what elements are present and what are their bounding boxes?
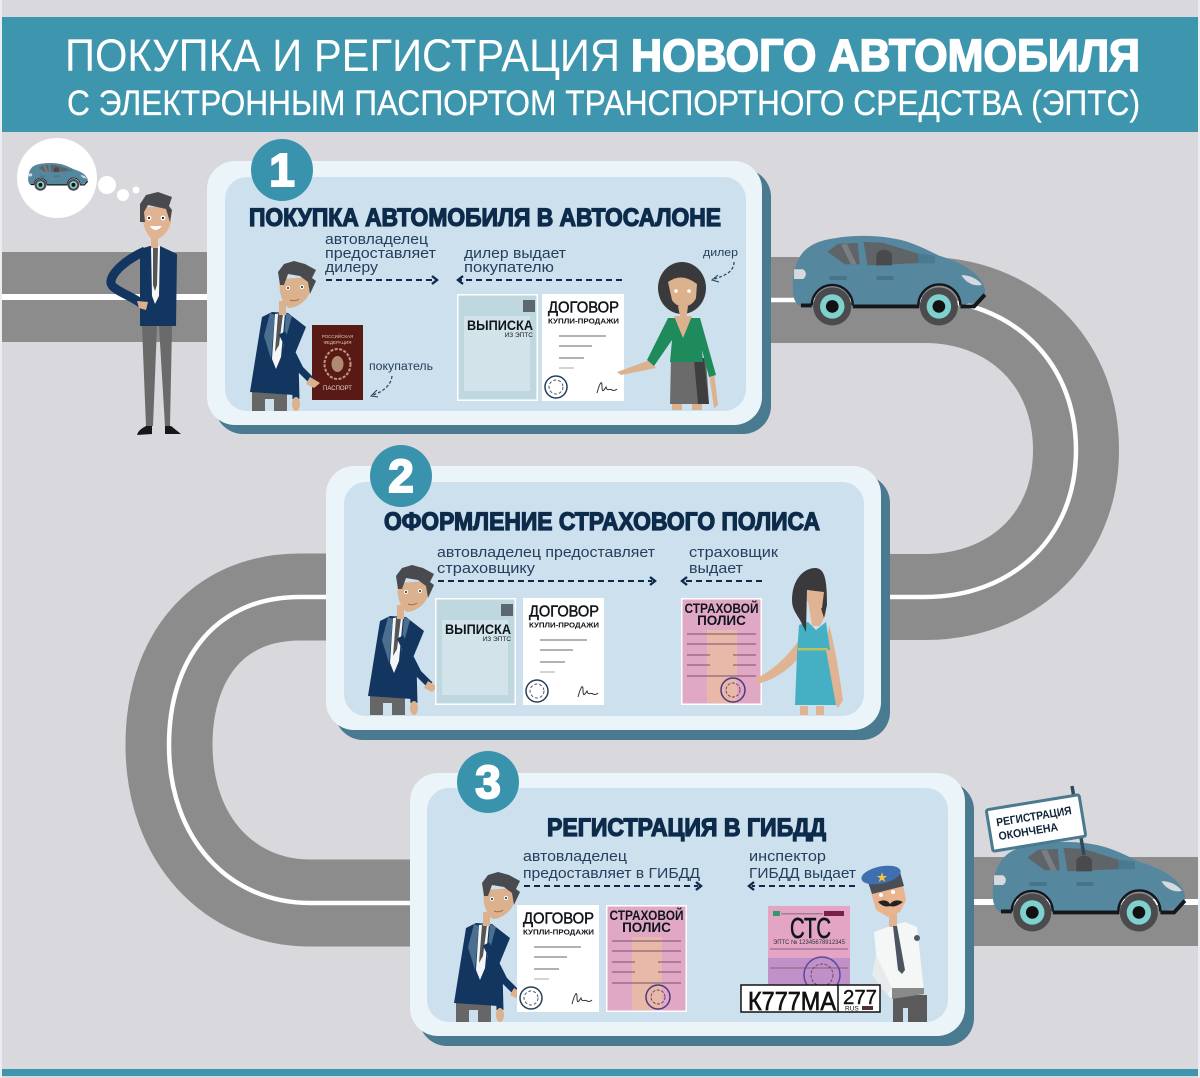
heading: РЕГИСТРАЦИЯ В ГИБДД — [547, 814, 826, 842]
icon: small car — [28, 163, 88, 191]
text: owner gives: автовладелец предоставляет — [437, 544, 655, 561]
text: dealer gives: дилер выдает — [464, 245, 566, 262]
sign post — [1072, 786, 1084, 855]
document: insurance policy: СТРАХОВОЙ — [684, 601, 758, 616]
heading: ОФОРМЛЕНИЕ СТРАХОВОГО ПОЛИСА — [384, 508, 820, 536]
document: insurance policy — [681, 598, 762, 705]
buyer figure — [250, 261, 320, 411]
panel: step 3 — [410, 751, 974, 1046]
license plate: К777МА — [748, 986, 837, 1016]
text: owner gives: дилеру — [325, 259, 379, 276]
arrow left — [749, 882, 855, 890]
document: contract: КУПЛИ-ПРОДАЖИ — [548, 316, 619, 326]
document: contract: ДОГОВОР — [529, 604, 599, 620]
document: STS: СТС — [790, 913, 831, 945]
heading: ПОКУПКА АВТОМОБИЛЯ В АВТОСАЛОНЕ — [249, 204, 721, 232]
text: owner gives: автовладелец — [325, 231, 428, 248]
arrow right — [438, 577, 655, 585]
arrow left — [458, 276, 622, 284]
passport: ФЕДЕРАЦИЯ — [324, 340, 352, 345]
text: insurer gives: страховщик — [689, 544, 778, 561]
text: inspector gives: инспектор — [749, 848, 826, 865]
title line 1: НОВОГО АВТОМОБИЛЯ — [631, 30, 1140, 81]
text: owner gives — [437, 544, 655, 577]
document: contract — [523, 598, 604, 705]
panel: step 1 — [207, 139, 771, 434]
text: insurer gives — [689, 544, 778, 577]
step number 3: 3 — [475, 756, 501, 808]
title line 1 — [65, 30, 1140, 81]
sign: registration finished: ОКОНЧЕНА — [998, 822, 1059, 843]
document: contract — [517, 905, 599, 1012]
arrow right — [524, 882, 701, 890]
text: owner gives: страховщику — [437, 560, 536, 577]
icon: car — [993, 842, 1185, 932]
step number 1: 1 — [269, 144, 295, 196]
passport: РОССИЙСКАЯ — [322, 332, 353, 339]
arrow right — [326, 276, 437, 284]
thought bubble with car — [17, 138, 140, 218]
text: dealer gives — [464, 245, 566, 276]
passport: ПАСПОРТ — [323, 386, 352, 392]
owner figure — [368, 565, 438, 715]
document: STS — [768, 906, 850, 993]
label: dealer — [703, 247, 738, 282]
document: contract — [542, 294, 624, 401]
text: owner gives — [325, 231, 436, 276]
text: dealer gives: покупателю — [464, 259, 554, 276]
document: insurance policy: ПОЛИС — [622, 920, 671, 935]
text: owner gives — [523, 848, 700, 882]
document: insurance policy: ПОЛИС — [697, 613, 746, 628]
road network — [2, 252, 1198, 946]
arrow left — [682, 577, 762, 585]
header banner — [2, 17, 1198, 132]
step number 2: 2 — [388, 450, 414, 502]
insurer figure — [755, 568, 843, 715]
text: owner gives: предоставляет в ГИБДД — [523, 865, 700, 882]
document: contract: КУПЛИ-ПРОДАЖИ — [523, 928, 594, 936]
document: contract: КУПЛИ-ПРОДАЖИ — [529, 620, 599, 630]
license plate: RUS — [845, 1006, 859, 1012]
inspector figure: ★ — [876, 872, 888, 884]
step number 2 — [370, 445, 432, 507]
label: buyer: покупатель — [369, 361, 433, 373]
sign: registration finished: РЕГИСТРАЦИЯ — [996, 805, 1073, 829]
text: inspector gives: ГИБДД выдает — [749, 865, 856, 882]
document: EPTS extract — [435, 598, 516, 705]
label: buyer — [369, 361, 433, 397]
label: dealer: дилер — [703, 247, 738, 259]
document: contract: ДОГОВОР — [548, 300, 619, 316]
license plate — [741, 985, 880, 1016]
panel: step 2 — [326, 445, 890, 740]
bottom bar — [2, 1069, 1198, 1076]
document: EPTS extract: ВЫПИСКА — [467, 317, 533, 333]
license plate: 277 — [843, 987, 877, 1009]
document: insurance policy: СТРАХОВОЙ — [610, 908, 684, 923]
document: EPTS extract — [457, 294, 538, 401]
step number 3 — [457, 751, 519, 813]
sign: registration finished — [986, 795, 1086, 851]
document: contract: ДОГОВОР — [523, 910, 594, 928]
text: insurer gives: выдает — [689, 560, 743, 577]
finish car with sign — [986, 786, 1185, 932]
owner figure — [454, 872, 524, 1022]
dealer figure — [617, 262, 718, 410]
passport — [312, 325, 363, 400]
document: EPTS extract: ИЗ ЭПТС — [483, 636, 511, 643]
step number 1 — [251, 139, 313, 201]
standing man — [111, 192, 181, 435]
document: STS: ЭПТС № 12345678912345 — [773, 939, 846, 946]
text: owner gives: автовладелец — [523, 848, 627, 865]
title line 1: ПОКУПКА И РЕГИСТРАЦИЯ — [65, 30, 620, 81]
document: EPTS extract: ИЗ ЭПТС — [505, 332, 533, 339]
text: inspector gives — [749, 848, 856, 882]
inspector figure — [860, 863, 927, 1022]
document: insurance policy — [606, 905, 687, 1012]
car on road top — [793, 236, 985, 326]
text: owner gives: предоставляет — [325, 245, 436, 262]
document: EPTS extract: ВЫПИСКА — [445, 621, 511, 637]
